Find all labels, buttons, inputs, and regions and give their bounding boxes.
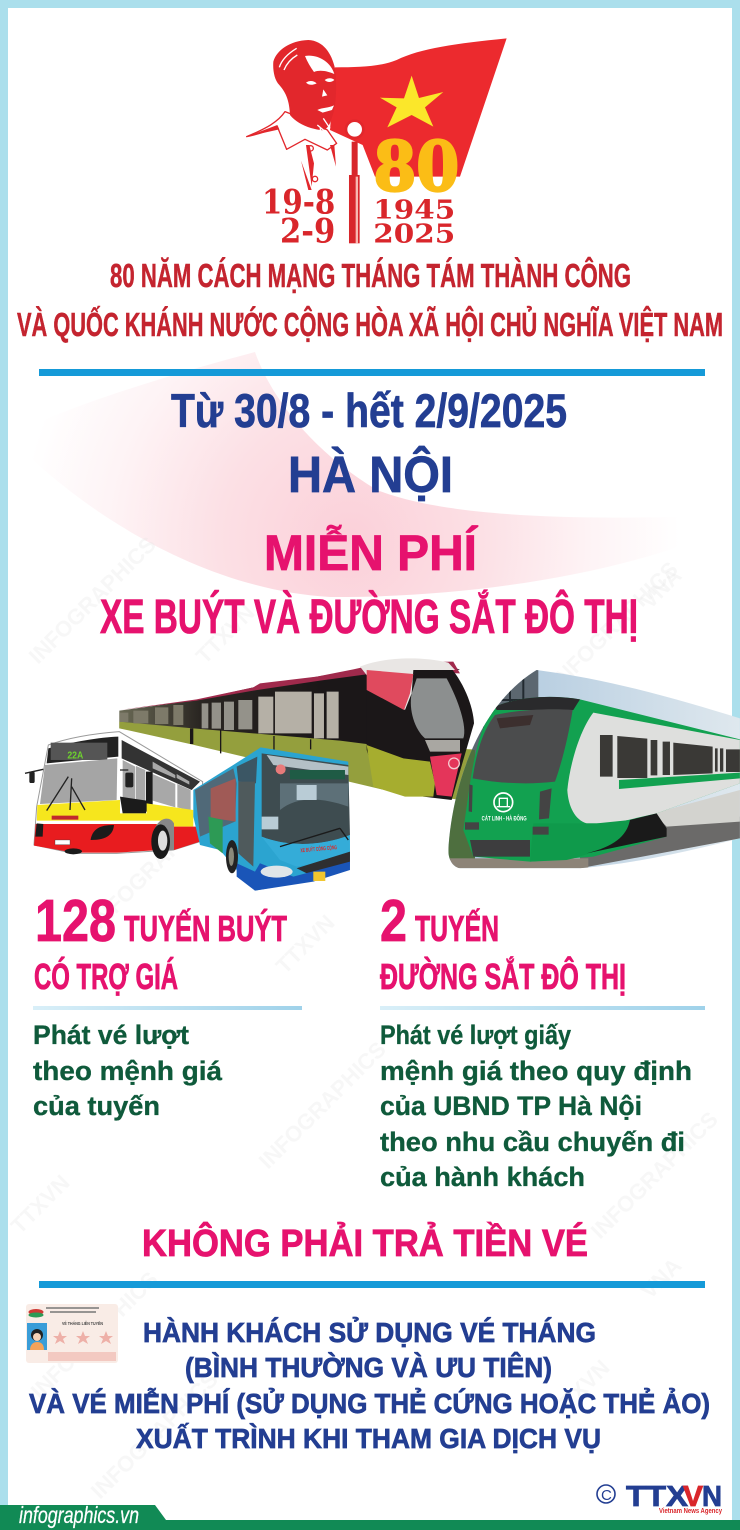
logo: 80 years anniversary: 2025 [373,220,455,250]
icon: microphone [346,121,363,243]
icon: portrait of President Ho Chi Minh [247,40,337,190]
text: bus tickets [33,1020,223,1121]
watermarks: TTXVN [6,1170,75,1239]
number 2: 2 [380,888,407,954]
text: bus tickets: của tuyến [33,1091,160,1121]
illustration: red metro front [360,658,474,800]
text: passengers with monthly tickets: XUẤT TRÌNH KHI THAM GIA DỊCH VỤ [136,1423,601,1454]
icon: monthly ticket card: VÉ THÁNG LIÊN TUYẾN [62,1319,104,1326]
text: passengers with monthly tickets: (BÌNH THƯỜNG VÀ ƯU TIÊN) [185,1352,552,1383]
title [17,256,723,343]
icon: red flag [330,38,507,177]
divider bottom [39,1281,705,1288]
illustration: green metro train: CÁT LINH - HÀ ĐÔNG [482,814,527,823]
watermarks: TTXVN [271,910,340,979]
footer website: infographics.vn [19,1502,139,1528]
text: railway tickets: theo nhu cầu chuyến đi [380,1127,685,1157]
footer bar [0,1502,740,1530]
headline free: MIỄN PHÍ [264,525,478,581]
heading bus routes: TUYẾN BUÝT [124,908,287,949]
watermarks: TTXVN [191,600,260,669]
text: railway tickets: mệnh giá theo quy định [380,1056,692,1086]
watermarks: INFOGRAPHICS [26,1267,163,1404]
illustration: yellow and red bus [25,732,203,859]
watermarks: INFOGRAPHICS [586,1107,723,1244]
illustration: red metro train [119,660,507,803]
illustration: green metro train [447,667,740,873]
number 128: 128 [35,888,116,954]
number 80: 80 [373,128,459,208]
text: railway tickets: của UBND TP Hà Nội [380,1091,642,1121]
text: railway tickets: Phát vé lượt giấy [380,1020,571,1050]
logo: TTXVN: C [601,1487,612,1504]
panel: bus routes: CÓ TRỢ GIÁ [34,955,178,997]
date heading: Từ 30/8 - hết 2/9/2025 [171,384,567,437]
illustration: yellow and red bus: 22A [67,750,83,761]
watermarks [6,532,723,1504]
illustration: blue bus [193,747,350,891]
text: bus tickets: theo mệnh giá [33,1056,223,1086]
watermarks: VNA [636,1253,686,1304]
logo: 80 years anniversary: 2-9 [280,212,335,251]
years right: 1945 [373,195,455,225]
icon: monthly ticket card [26,1304,118,1363]
dates left: 19-8 [262,182,335,221]
logo: TTXVN: Vietnam News Agency [659,1506,723,1515]
watermarks: INFOGRAPHICS [86,1367,223,1504]
heading railway: TUYẾN [415,908,499,949]
icon: yellow star [380,76,443,127]
watermarks: INFOGRAPHICS [86,797,223,934]
panel: urban railway: ĐƯỜNG SẮT ĐÔ THỊ [380,955,626,997]
watermarks: INFOGRAPHICS [546,557,683,694]
panel: urban railway [380,888,705,1192]
watermarks: INFOGRAPHICS [254,1037,391,1174]
watermarks: VNA [636,563,686,614]
watermarks: TTXVN [546,1355,615,1424]
logo: TTXVN [597,1481,723,1515]
panel: bus routes [33,888,302,1121]
text: railway tickets [380,1020,692,1192]
text: bus tickets: Phát vé lượt [33,1020,189,1050]
text: passengers with monthly tickets: HÀNH KHÁCH SỬ DỤNG VÉ THÁNG [143,1316,596,1348]
city heading: HÀ NỘI [288,445,453,503]
logo: TTXVN: N [702,1481,722,1513]
watermarks: INFOGRAPHICS [24,532,161,669]
callout: no ticket fee: KHÔNG PHẢI TRẢ TIỀN VÉ [142,1220,588,1265]
logo: TTXVN: V [683,1481,704,1513]
divider top [39,369,705,376]
logo: 80 years anniversary [247,38,507,251]
text: railway tickets: của hành khách [380,1162,585,1192]
background swoosh [8,352,732,597]
logo: TTXVN: TTX [626,1481,689,1513]
train body [463,697,740,862]
text: passengers with monthly tickets [29,1316,710,1454]
illustration: blue bus: XE BUÝT CÔNG CỘNG [300,843,338,854]
